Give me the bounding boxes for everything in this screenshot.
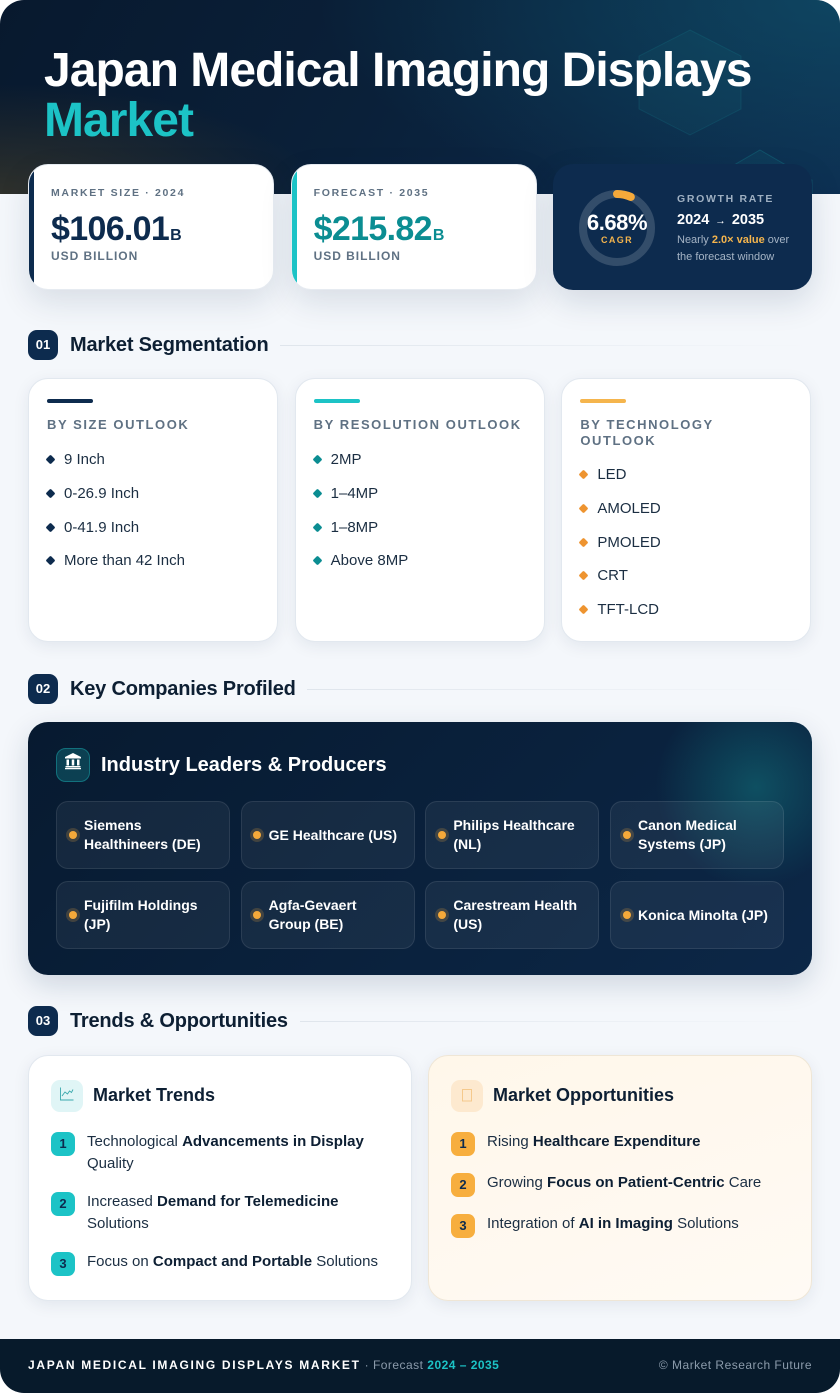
panel: by size outlook	[28, 378, 278, 642]
section badge 03: 03	[36, 1013, 50, 1028]
company: philips	[425, 801, 599, 869]
panel: by technology outlook: OUTLOOK	[580, 433, 656, 448]
panel: by technology outlook: AMOLED	[597, 500, 661, 517]
panel: market opportunities: Growing Focus on Patient-Centric Care	[487, 1174, 761, 1191]
panel: by resolution outlook: 2MP	[331, 451, 362, 468]
company: fujifilm	[56, 881, 230, 949]
title: Japan Medical Imaging Displays	[44, 44, 751, 97]
footer	[0, 1339, 840, 1393]
company: ge	[241, 801, 415, 869]
company: canon: Systems (JP)	[638, 836, 726, 852]
opportunity 3	[451, 1214, 475, 1238]
panel: by technology outlook: LED	[597, 466, 627, 483]
trend 1: 1	[59, 1136, 67, 1151]
panel: industry leaders	[28, 722, 812, 975]
stat card: market size: USD BILLION	[51, 249, 138, 263]
section badge 01	[28, 330, 58, 360]
company: ge: GE Healthcare (US)	[269, 826, 397, 842]
panel: by technology outlook: BY TECHNOLOGY	[580, 417, 714, 432]
panel heading: Industry Leaders & Producers	[101, 754, 387, 776]
stat card: growth rate	[553, 164, 812, 290]
section badge 02: 02	[36, 681, 50, 696]
stat card: market size: $106.01B	[51, 210, 182, 248]
panel: by technology outlook: CRT	[597, 567, 628, 584]
panel: market trends: Focus on Compact and Portable Solutions	[87, 1253, 378, 1270]
trend 2: 2	[59, 1196, 67, 1211]
company: konica	[610, 881, 784, 949]
growth note: Nearly 2.0× value over	[677, 234, 789, 246]
panel: by technology outlook	[561, 378, 811, 642]
company: siemens: Siemens	[84, 817, 142, 833]
panel: market trends: Technological Advancements in Display	[87, 1133, 364, 1150]
company: konica: Konica Minolta (JP)	[638, 906, 768, 922]
panel: market opportunities: Integration of AI in Imaging Solutions	[487, 1215, 739, 1232]
title: Market	[44, 94, 193, 147]
panel: market trends: Quality	[87, 1155, 134, 1172]
opportunity 2	[451, 1173, 475, 1197]
panel: by size outlook: More than 42 Inch	[64, 552, 185, 569]
growth note: the forecast window	[677, 250, 774, 262]
company: fujifilm: Fujifilm Holdings	[84, 897, 198, 913]
cagr label: CAGR	[601, 235, 633, 245]
opportunity 1	[451, 1132, 475, 1156]
company: philips: Philips Healthcare	[453, 817, 575, 833]
growth years: 2024 → 2035	[677, 212, 764, 228]
trend 3: 3	[59, 1256, 67, 1271]
company: agfa: Agfa-Gevaert	[269, 897, 357, 913]
section badge 02	[28, 674, 58, 704]
stat card: forecast: $215.82B	[314, 210, 444, 248]
icon: opportunity box	[451, 1080, 483, 1112]
trend 2	[51, 1192, 75, 1216]
company: fujifilm: (JP)	[84, 916, 110, 932]
panel: market trends: Solutions	[87, 1215, 149, 1232]
panel: market opportunities: Rising Healthcare Expenditure	[487, 1133, 700, 1150]
company: carestream: Carestream Health	[453, 897, 577, 913]
panel: market trends	[28, 1055, 412, 1301]
panel: by technology outlook: TFT-LCD	[597, 601, 659, 618]
trend 1	[51, 1132, 75, 1156]
stat card: market size: MARKET SIZE · 2024	[51, 187, 185, 199]
panel: by size outlook: 0-26.9 Inch	[64, 485, 139, 502]
section badge 03	[28, 1006, 58, 1036]
company: siemens	[56, 801, 230, 869]
stat card: forecast	[291, 164, 537, 290]
header banner	[0, 0, 840, 194]
panel: by resolution outlook	[295, 378, 545, 642]
decorative hexagons	[638, 30, 812, 194]
panel: by resolution outlook: Above 8MP	[331, 552, 408, 569]
opportunity 3: 3	[459, 1218, 467, 1233]
company: agfa	[241, 881, 415, 949]
company: carestream: (US)	[453, 916, 482, 932]
opportunity 1: 1	[459, 1136, 467, 1151]
company: siemens: Healthineers (DE)	[84, 836, 201, 852]
stat card: forecast: USD BILLION	[314, 249, 401, 263]
company: carestream	[425, 881, 599, 949]
panel: by technology outlook: PMOLED	[597, 534, 661, 551]
growth label: GROWTH RATE	[677, 193, 774, 205]
stat card: forecast: FORECAST · 2035	[314, 187, 429, 199]
section badge 01: 01	[36, 337, 50, 352]
stat card: market size	[28, 164, 274, 290]
cagr value: 6.68%	[587, 210, 647, 235]
panel heading: Market Opportunities	[493, 1085, 674, 1105]
cagr ring	[579, 190, 655, 266]
footer title: JAPAN MEDICAL IMAGING DISPLAYS MARKET · Forecast 2024 – 2035	[28, 1358, 499, 1372]
heading: key companies: Key Companies Profiled	[70, 678, 296, 700]
panel: by resolution outlook: 1–4MP	[331, 485, 378, 502]
panel: by size outlook: 0-41.9 Inch	[64, 519, 139, 536]
panel: by size outlook: 9 Inch	[64, 451, 105, 468]
trend 3	[51, 1252, 75, 1276]
company: canon: Canon Medical	[638, 817, 737, 833]
panel heading: Market Trends	[93, 1085, 215, 1105]
heading: market segmentation: Market Segmentation	[70, 334, 268, 356]
company: agfa: Group (BE)	[269, 916, 343, 932]
icon: chart	[51, 1080, 83, 1112]
panel: by size outlook: BY SIZE OUTLOOK	[47, 417, 189, 432]
panel: by resolution outlook: BY RESOLUTION OUTLOOK	[314, 417, 522, 432]
panel: market trends: Increased Demand for Telemedicine	[87, 1193, 338, 1210]
panel: by resolution outlook: 1–8MP	[331, 519, 378, 536]
panel: market opportunities	[428, 1055, 812, 1301]
company: philips: (NL)	[453, 836, 481, 852]
heading: trends and opportunities: Trends & Opportunities	[70, 1010, 288, 1032]
opportunity 2: 2	[459, 1177, 467, 1192]
title	[44, 44, 751, 147]
growth note	[677, 234, 789, 262]
icon: institution	[56, 748, 90, 782]
company: canon	[610, 801, 784, 869]
footer credit: © Market Research Future	[659, 1358, 812, 1372]
